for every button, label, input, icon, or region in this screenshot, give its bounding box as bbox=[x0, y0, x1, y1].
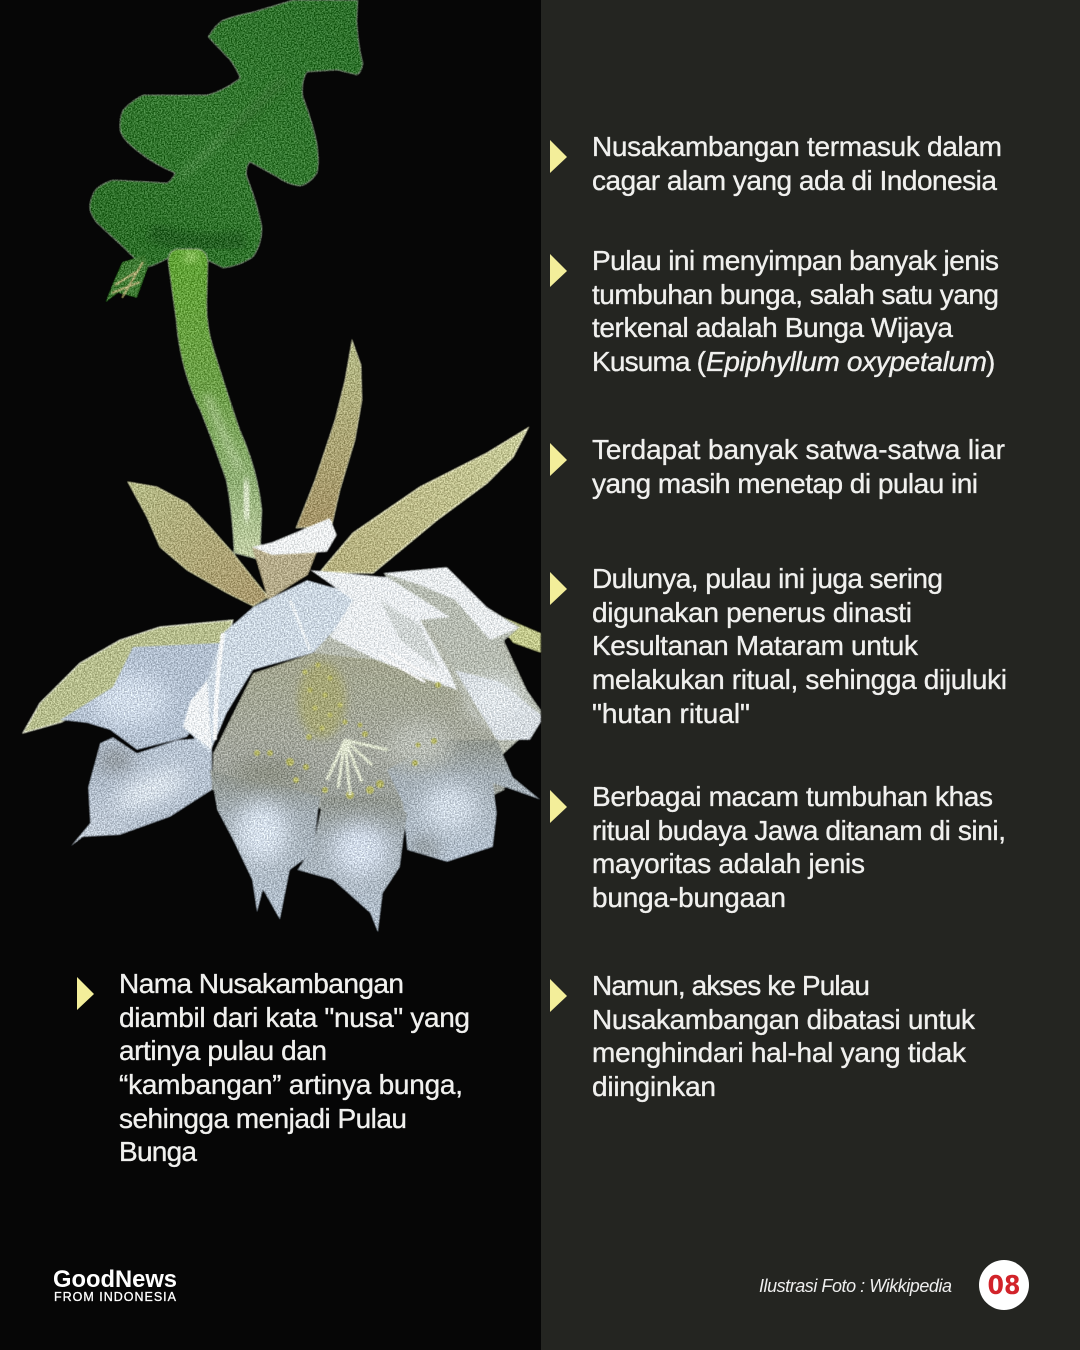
text: item 1: cagar alam yang ada di Indonesia bbox=[592, 165, 997, 196]
sepal: center bbox=[296, 340, 362, 528]
text: item 6: Nusakambangan dibatasi untuk bbox=[592, 1004, 976, 1035]
text: item 6 bbox=[592, 970, 976, 1102]
petal highlights and shadows bbox=[92, 674, 521, 876]
text: item 3: yang masih menetap di pulau ini bbox=[592, 468, 978, 499]
text: left panel item: artinya pulau dan bbox=[119, 1035, 327, 1066]
text: item 2 bbox=[592, 245, 999, 377]
central cup bbox=[212, 653, 505, 830]
aerial root cluster bbox=[105, 255, 148, 303]
text: item 5: ritual budaya Jawa ditanam di sini, bbox=[592, 815, 1006, 846]
stamens bbox=[254, 662, 441, 799]
left petal blue bbox=[60, 643, 222, 750]
text: item 3: Terdapat banyak satwa-satwa liar bbox=[592, 434, 1005, 465]
text: item 6: Namun, akses ke Pulau bbox=[592, 970, 870, 1001]
lower center-left petal bbox=[210, 770, 320, 920]
text: left panel item: Bunga bbox=[119, 1136, 197, 1167]
right green tip bbox=[487, 610, 541, 653]
logo: GoodNews from Indonesia: FROM INDONESIA bbox=[54, 1290, 177, 1304]
list item: arrow 2 bbox=[550, 254, 567, 287]
central white petal bbox=[183, 580, 353, 753]
text: item 2: tumbuhan bunga, salah satu yang bbox=[592, 279, 999, 310]
text: left panel item: sehingga menjadi Pulau bbox=[119, 1103, 407, 1134]
text: left panel item bbox=[119, 968, 470, 1167]
text: item 5 bbox=[592, 781, 1006, 913]
text: item 2: ) bbox=[986, 346, 995, 377]
text: item 2: Pulau ini menyimpan banyak jenis bbox=[592, 245, 999, 276]
calyx white fold bbox=[252, 518, 337, 555]
lower left petal bbox=[70, 737, 212, 847]
text: item 2: terkenal adalah Bunga Wijaya bbox=[592, 312, 953, 343]
text: item 5: mayoritas adalah jenis bbox=[592, 848, 865, 879]
text: item 2: Kusuma ( bbox=[592, 346, 707, 377]
text: item 6: menghindari hal-hal yang tidak bbox=[592, 1037, 967, 1068]
stem bbox=[168, 249, 262, 560]
text: item 1 bbox=[592, 131, 1002, 196]
text: item 4: digunakan penerus dinasti bbox=[592, 597, 912, 628]
text: item 2: Epiphyllum oxypetalum bbox=[706, 346, 987, 377]
page number badge: 08 bbox=[988, 1271, 1020, 1301]
list item: arrow left panel bbox=[77, 977, 94, 1010]
page number badge bbox=[979, 1260, 1029, 1310]
leaf bbox=[90, 0, 363, 303]
under-layer for upper right petals bbox=[300, 600, 541, 760]
list item: arrow 6 bbox=[550, 979, 567, 1012]
sepal: left bbox=[128, 482, 268, 606]
text: item 5: bunga-bungaan bbox=[592, 882, 786, 913]
text: item 6: diinginkan bbox=[592, 1071, 716, 1102]
inner petal shadow bbox=[380, 600, 440, 670]
text: item 4: Kesultanan Mataram untuk bbox=[592, 630, 919, 661]
text: item 3 bbox=[592, 434, 1005, 499]
text: left panel item: Nama Nusakambangan bbox=[119, 968, 404, 999]
calyx tube bbox=[252, 545, 320, 600]
text: item 5: Berbagai macam tumbuhan khas bbox=[592, 781, 993, 812]
right back petal bbox=[383, 567, 541, 740]
background: photo panel bbox=[0, 0, 541, 1350]
logo: GoodNews from Indonesia: GoodNews bbox=[53, 1266, 177, 1293]
text: left panel item: “kambangan” artinya bunga, bbox=[119, 1069, 463, 1100]
illustration: Wijaya Kusuma flower photo bbox=[23, 0, 541, 933]
lower center petal bbox=[297, 797, 407, 933]
photo credit: Ilustrasi Foto : Wikkipedia bbox=[759, 1276, 952, 1296]
pistil stripes bbox=[380, 652, 436, 682]
text: item 4: Dulunya, pulau ini juga sering bbox=[592, 563, 943, 594]
list item: arrow 1 bbox=[550, 140, 567, 173]
text: item 4: "hutan ritual" bbox=[592, 698, 750, 729]
text: item 4 bbox=[592, 563, 1007, 729]
text: left panel item: diambil dari kata "nusa" yang bbox=[119, 1002, 470, 1033]
sepal: right bbox=[320, 428, 528, 573]
list item: arrow 3 bbox=[550, 443, 567, 476]
pistil filaments bbox=[327, 740, 388, 795]
list item: arrow 5 bbox=[550, 790, 567, 823]
right white petal bbox=[310, 570, 457, 690]
text: item 4: melakukan ritual, sehingga dijuluki bbox=[592, 664, 1007, 695]
right lower petal bbox=[387, 740, 541, 862]
background: text panel bbox=[541, 0, 1080, 1350]
left outer petal bbox=[23, 620, 233, 733]
list item: arrow 4 bbox=[550, 572, 567, 605]
text: item 1: Nusakambangan termasuk dalam bbox=[592, 131, 1002, 162]
